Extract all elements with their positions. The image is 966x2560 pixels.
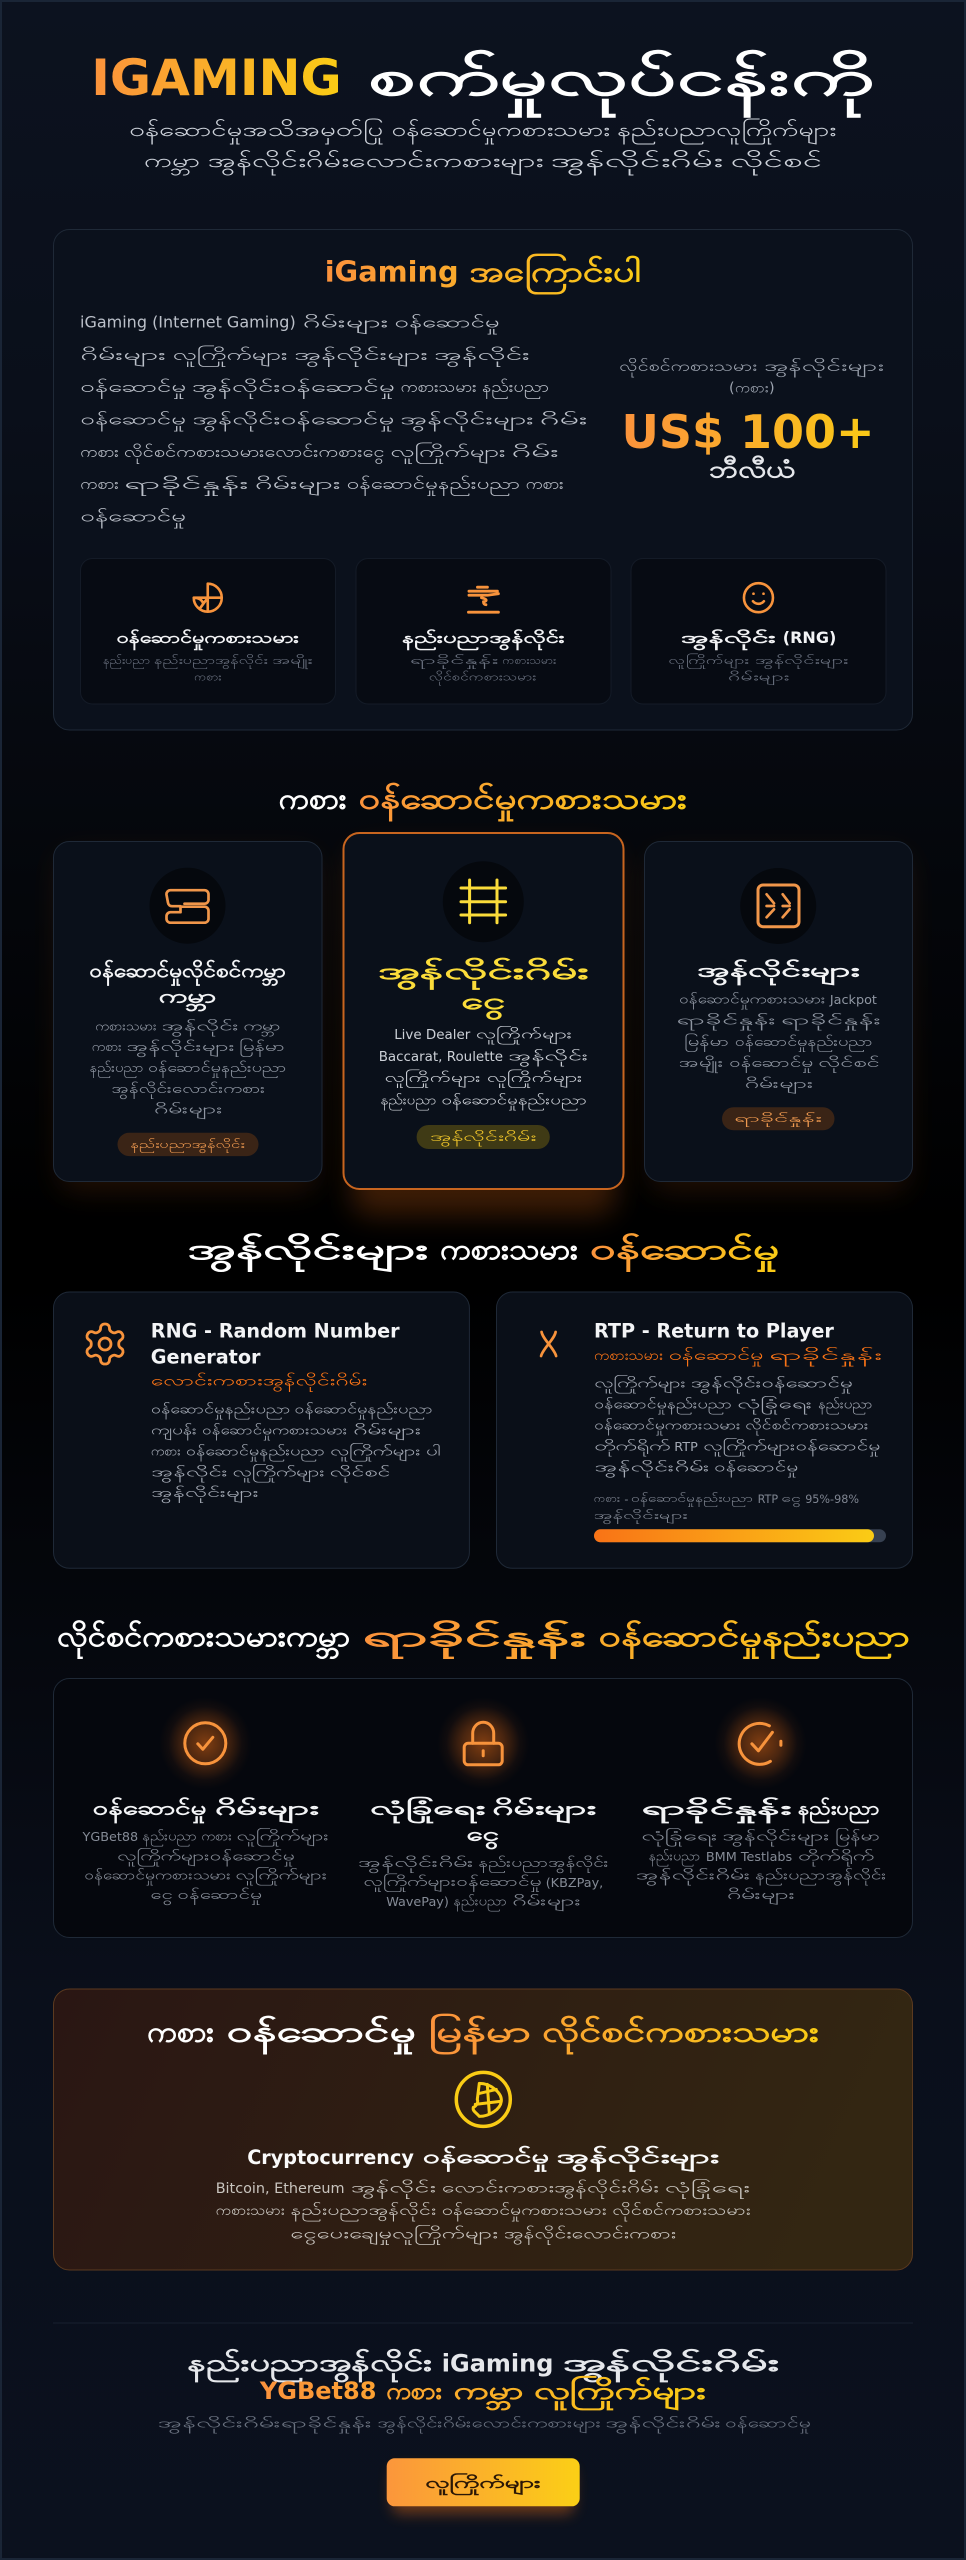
column description <box>358 1855 608 1911</box>
icon: x mark <box>541 1332 556 1356</box>
icon: slot frame <box>740 868 816 944</box>
stat label: ကစား <box>735 381 769 397</box>
intro paragraph: ဂိမ်း <box>539 410 588 428</box>
feature description: ကစားသမား <box>503 654 556 667</box>
panel description: ဝန်ဆောင်မှု <box>714 1459 798 1477</box>
intro paragraph: အွန်လိုင်းများ <box>294 345 428 367</box>
section heading: technology <box>188 1232 779 1273</box>
card description: အွန်လိုင်း <box>508 1048 588 1066</box>
column title <box>93 1795 319 1824</box>
column description: အွန်လိုင်းဂိမ်း <box>358 1855 474 1873</box>
column description: ငွေ <box>150 1888 173 1905</box>
panel subtitle: ဝန်ဆောင်မှု <box>669 1346 763 1367</box>
column title: ဂိမ်းများ <box>492 1795 596 1824</box>
card description: မြန်မာ <box>239 1038 285 1057</box>
card description: မြန်မာ <box>684 1033 729 1052</box>
panel: crypto <box>54 1989 912 2270</box>
panel heading: ကစား <box>147 2015 214 2049</box>
subtitle: အွန်လိုင်းဂိမ်းလောင်းကစားများ <box>208 149 543 176</box>
intro paragraph: ဂိမ်း <box>511 442 559 461</box>
column title: ငွေ <box>466 1822 500 1850</box>
stat value: US$ 100+ <box>622 405 875 459</box>
crypto description: Bitcoin, Ethereum <box>216 2181 345 2197</box>
subtitle: ကမ္ဘာ <box>144 149 200 176</box>
crypto title: Cryptocurrency <box>247 2146 414 2169</box>
card description: ကမ္ဘာ <box>243 1019 280 1036</box>
card description <box>89 1018 286 1120</box>
intro paragraph: ဝန်ဆောင်မှု <box>80 377 186 399</box>
card description: ရာခိုင်နှုန်း <box>676 1012 776 1030</box>
icon: gear <box>87 1324 123 1364</box>
card description: အွန်လိုင်းလောင်းကစား <box>111 1081 265 1099</box>
card description: ကစား <box>92 1040 122 1055</box>
column description: ဝန်ဆောင်မှုကစားသမား <box>84 1868 231 1886</box>
column title: နည်းပညာ <box>798 1795 879 1824</box>
crypto description: ဝန်ဆောင်မှုကစားသမား <box>442 2201 607 2222</box>
feature card 1 <box>80 558 336 704</box>
column description: အွန်လိုင်းဂိမ်း <box>635 1868 750 1886</box>
intro paragraph: ဝန်ဆောင်မှု <box>80 410 186 432</box>
panel heading: ဝန်ဆောင်မှု <box>227 2015 416 2056</box>
section heading: safety: ဝန်ဆောင်မှုနည်းပညာ <box>599 1619 910 1660</box>
crypto description <box>216 2177 751 2245</box>
card title: ငွေ <box>461 987 505 1021</box>
column description: ဂိမ်းများ <box>512 1893 581 1911</box>
feature description: အွန်လိုင်းများ <box>755 654 849 669</box>
panel description: ဝန်ဆောင်မှုနည်းပညာ <box>186 1443 325 1461</box>
column description: တိုက်ရိုက် <box>798 1848 874 1866</box>
panel description: လိုင်စင်ကစားသမား <box>745 1418 868 1436</box>
panel description: အွန်လိုင်း <box>151 1464 228 1482</box>
panel: RTP <box>496 1292 912 1568</box>
intro paragraph: လူကြိုက်များ <box>172 345 288 367</box>
crypto title: အွန်လိုင်းများ <box>557 2144 719 2173</box>
column description <box>635 1827 886 1905</box>
call to action button: လူကြိုက်များ <box>425 2472 541 2496</box>
card title: အွန်လိုင်းဂိမ်း <box>378 956 589 991</box>
crypto description: အွန်လိုင်း <box>351 2178 437 2199</box>
column description: အွန်လိုင်းများ <box>722 1828 829 1846</box>
subtitle <box>129 117 836 176</box>
feature description <box>410 654 556 686</box>
intro paragraph: အွန်လိုင်းဝန်ဆောင်မှု <box>192 410 394 432</box>
icon: pie leaf <box>194 584 222 612</box>
column description: လုံခြုံရေး <box>641 1827 717 1846</box>
RTP note: ငွေ <box>782 1492 801 1507</box>
stat label <box>619 357 885 397</box>
column description: နည်းပညာအွန်လိုင်း <box>755 1868 886 1886</box>
RTP note: - <box>624 1493 628 1506</box>
column description: BMM Testlabs <box>706 1850 793 1865</box>
section heading: game types: ဝန်ဆောင်မှုကစားသမား <box>359 782 687 822</box>
card description <box>379 1025 588 1110</box>
icon: dashed check <box>714 1697 806 1789</box>
panel description: ဝန်ဆောင်မှုနည်းပညာ <box>151 1402 290 1420</box>
panel title <box>151 1319 400 1368</box>
crypto description: ငွေပေးချေမှုလူကြိုက်များ <box>290 2223 499 2245</box>
card description: နည်းပညာ <box>89 1060 143 1078</box>
panel description: လုံခြုံရေး <box>737 1396 812 1415</box>
intro paragraph: ဂိမ်းများ <box>302 312 388 334</box>
section heading: game types <box>279 782 687 822</box>
intro paragraph <box>80 312 588 528</box>
panel title: RNG - Random Number <box>151 1319 400 1342</box>
feature card 3 <box>631 558 886 704</box>
column description: YGBet88 <box>82 1830 138 1845</box>
panel subtitle <box>594 1346 883 1367</box>
stat unit: ဘီလီယံ <box>709 454 796 483</box>
card title: ကမ္ဘာ <box>159 985 216 1013</box>
feature description: နည်းပညာ <box>103 654 150 669</box>
title <box>91 48 874 119</box>
panel description: အွန်လိုင်းဂိမ်း <box>594 1459 709 1477</box>
card description: ဝန်ဆောင်မှုနည်းပညာ <box>441 1092 586 1110</box>
card description: အွန်လိုင်း <box>161 1018 239 1036</box>
tag <box>722 1107 834 1130</box>
feature description: နည်းပညာအွန်လိုင်း <box>154 654 268 669</box>
panel description: လိုင်စင် <box>329 1464 391 1482</box>
card description: လူကြိုက်များ <box>487 1069 582 1088</box>
column title <box>642 1795 879 1824</box>
feature title: နည်းပညာအွန်လိုင်း <box>402 628 565 651</box>
intro paragraph: iGaming (Internet Gaming) <box>80 312 296 332</box>
intro paragraph: အွန်လိုင်း <box>434 345 530 367</box>
subtitle: အွန်လိုင်းဂိမ်း <box>551 149 723 176</box>
intro paragraph: ကစား <box>80 442 119 461</box>
section heading: safety: ရာခိုင်နှုန်း <box>363 1619 586 1660</box>
icon: padlock <box>437 1697 529 1789</box>
panel title: Generator <box>151 1345 261 1368</box>
column title <box>370 1794 596 1850</box>
feature description <box>103 654 313 684</box>
stat label: လိုင်စင်ကစားသမား <box>619 357 758 378</box>
card description: Live Dealer <box>394 1028 471 1043</box>
card description: ဂိမ်းများ <box>744 1076 813 1094</box>
column description: လူကြိုက်များ <box>236 1827 329 1846</box>
panel description: နည်းပညာ <box>818 1397 872 1415</box>
subtitle: လိုင်စင် <box>731 149 823 176</box>
icon: bonsai <box>468 587 498 612</box>
crypto description: လိုင်စင်ကစားသမား <box>612 2201 751 2222</box>
panel subtitle: လောင်းကစားအွန်လိုင်းဂိမ်း <box>151 1372 368 1393</box>
card title: အွန်လိုင်းများ <box>697 957 859 986</box>
panel description: လူကြိုက်များ <box>232 1463 325 1482</box>
intro paragraph: ကစားသမား <box>400 377 476 396</box>
feature title: အွန်လိုင်း <box>681 628 776 651</box>
RTP note: RTP <box>758 1493 778 1506</box>
section heading: game types: ကစား <box>279 782 346 816</box>
intro paragraph: ဝန်ဆောင်မှု <box>394 312 499 334</box>
column description: နည်းပညာ <box>142 1828 197 1846</box>
card description <box>676 992 881 1094</box>
section heading: technology: ဝန်ဆောင်မှု <box>590 1232 779 1273</box>
feature description: လူကြိုက်များ <box>669 653 749 669</box>
column description: နည်းပညာအွန်လိုင်း <box>478 1855 608 1873</box>
RTP note: 95%-98% <box>805 1493 859 1506</box>
RTP note: ဝန်ဆောင်မှုနည်းပညာ <box>631 1492 753 1507</box>
subtitle: ဝန်ဆောင်မှုကစားသမား <box>392 118 610 145</box>
footer note <box>157 2415 810 2433</box>
intro paragraph: ရာခိုင်နှုန်း <box>124 474 249 496</box>
column description: လူကြိုက်များ <box>235 1867 327 1886</box>
card title: ဝန်ဆောင်မှုလိုင်စင်ကမ္ဘာ <box>89 958 286 987</box>
intro paragraph: အွန်လိုင်းများ <box>400 410 534 432</box>
card description: ဝန်ဆောင်မှုနည်းပညာ <box>148 1060 286 1078</box>
panel heading: iGaming <box>325 254 459 288</box>
panel description: လူကြိုက်များဝန်ဆောင်မှု <box>703 1437 880 1456</box>
column: licence <box>82 1697 329 1905</box>
feature description: အမျိုး <box>272 654 313 669</box>
column description: နည်းပညာ <box>453 1893 507 1911</box>
feature title: (RNG) <box>783 628 836 647</box>
section heading: safety <box>57 1619 910 1660</box>
column description: ဂိမ်းများ <box>727 1887 795 1905</box>
panel description: ပါ <box>426 1443 441 1459</box>
icon: smiley <box>744 583 773 612</box>
RTP note: အွန်လိုင်းများ <box>594 1509 688 1524</box>
stat label: ) <box>769 381 775 397</box>
feature description: လိုင်စင်ကစားသမား <box>429 670 536 686</box>
card description: ဝန်ဆောင်မှုနည်းပညာ <box>735 1034 872 1052</box>
intro paragraph: ကစား <box>526 474 564 493</box>
panel description: ဝန်ဆောင်မှုနည်းပညာ <box>594 1397 732 1415</box>
icon: boot badge <box>150 868 226 944</box>
footer heading: ကမ္ဘာ <box>453 2377 523 2411</box>
panel description: တိုက်ရိုက် <box>594 1438 670 1456</box>
card description: ဝန်ဆောင်မှုကစားသမား <box>679 992 825 1010</box>
panel description: ဝန်ဆောင်မှုကစားသမား <box>202 1423 347 1441</box>
panel: RNG <box>54 1292 469 1568</box>
column description: (KBZPay, <box>546 1876 603 1891</box>
card description: Baccarat, Roulette <box>379 1050 503 1065</box>
crypto description: ကစားသမား <box>216 2203 285 2219</box>
feature description: ဂိမ်းများ <box>728 670 790 686</box>
column title: ဂိမ်းများ <box>215 1795 319 1824</box>
tag <box>417 1125 550 1149</box>
crypto description: လောင်းကစားအွန်လိုင်းဂိမ်း <box>442 2178 659 2199</box>
column title: လုံခြုံရေး <box>370 1794 485 1824</box>
intro paragraph: ဝန်ဆောင်မှု <box>80 506 186 528</box>
panel description <box>151 1402 441 1503</box>
column description: နည်းပညာ <box>648 1848 700 1866</box>
tag: ရာခိုင်နှုန်း <box>735 1112 822 1127</box>
card description: ကစားသမား <box>95 1019 156 1034</box>
footer heading: အွန်လိုင်းဂိမ်း <box>562 2348 779 2383</box>
panel heading <box>147 2014 819 2056</box>
column description: မြန်မာ <box>835 1827 880 1846</box>
card description: ရာခိုင်နှုန်း <box>780 1012 881 1030</box>
card description: ဂိမ်းများ <box>154 1102 223 1120</box>
crypto title: ဝန်ဆောင်မှု <box>423 2144 549 2173</box>
panel description: ကျပန်း <box>151 1423 197 1441</box>
intro paragraph: ကစား <box>80 474 119 493</box>
column: encryption <box>358 1697 608 1911</box>
intro paragraph: အွန်လိုင်းဝန်ဆောင်မှု <box>192 377 395 399</box>
footer heading: လူကြိုက်များ <box>534 2375 706 2411</box>
footer heading <box>188 2348 779 2411</box>
column title: ရာခိုင်နှုန်း <box>642 1795 791 1824</box>
panel heading: အကြောင်းပါ <box>470 253 641 295</box>
card title <box>378 956 589 1021</box>
intro paragraph: ဂိမ်းများ <box>255 474 341 496</box>
section heading: safety: လိုင်စင်ကစားသမားကမ္ဘာ <box>57 1619 350 1660</box>
panel description <box>594 1375 880 1477</box>
panel subtitle: ကစားသမား <box>594 1348 663 1364</box>
card: slots <box>644 842 912 1191</box>
crypto title <box>247 2144 719 2173</box>
panel description: RTP <box>674 1440 698 1455</box>
crypto description: အွန်လိုင်းလောင်းကစား <box>504 2224 677 2245</box>
crypto description: နည်းပညာအွန်လိုင်း <box>290 2201 437 2222</box>
column description: လူကြိုက်များဝန်ဆောင်မှု <box>117 1847 294 1866</box>
icon: crypto coin <box>456 2072 510 2126</box>
title: IGAMING <box>91 48 342 107</box>
card: live casino (featured) <box>344 833 624 1215</box>
panel title: RTP - Return to Player <box>594 1319 834 1342</box>
feature title: ဝန်ဆောင်မှုကစားသမား <box>116 628 299 651</box>
panel heading <box>325 253 641 295</box>
intro paragraph: လူကြိုက်များ <box>390 442 506 464</box>
panel description: ဝန်ဆောင်မှုကစားသမား <box>594 1418 740 1436</box>
crypto description: လုံခြုံရေး <box>665 2177 751 2199</box>
column description: WavePay) <box>386 1895 449 1910</box>
tag <box>118 1133 258 1156</box>
column title: ဝန်ဆောင်မှု <box>93 1795 207 1824</box>
card description: ဝန်ဆောင်မှု <box>729 1055 813 1073</box>
card title <box>89 958 286 1013</box>
panel heading: လိုင်စင်ကစားသမား <box>542 2015 819 2056</box>
panel description: အွန်လိုင်းဝန်ဆောင်မှု <box>690 1376 852 1394</box>
footer heading: YGBet88 <box>259 2377 376 2405</box>
subtitle: နည်းပညာလူကြိုက်များ <box>617 117 836 145</box>
footer note: ဝန်ဆောင်မှု <box>725 2415 810 2433</box>
column: audit <box>635 1697 886 1905</box>
panel description: ဂိမ်းများ <box>353 1423 421 1441</box>
tag: အွန်လိုင်းဂိမ်း <box>430 1130 537 1146</box>
title: စက်မှုလုပ်ငန်းကို <box>368 48 874 119</box>
feature description: ရာခိုင်နှုန်း <box>410 654 499 669</box>
card description: Jackpot <box>829 993 877 1008</box>
call to action button <box>387 2458 580 2514</box>
card description: အွန်လိုင်းများ <box>126 1039 235 1057</box>
feature title <box>681 628 836 651</box>
intro paragraph: ဝန်ဆောင်မှုနည်းပညာ <box>346 474 520 496</box>
RTP note <box>594 1492 859 1524</box>
intro paragraph: ဂိမ်းများ <box>80 345 166 367</box>
footer heading: ကစား <box>386 2377 442 2405</box>
column description: လူကြိုက်များဝန်ဆောင်မှု <box>363 1873 541 1892</box>
column description: ကစား <box>201 1829 232 1844</box>
panel description: အွန်လိုင်းများ <box>151 1485 259 1503</box>
card description: အမျိုး <box>678 1055 723 1073</box>
feature card 2 <box>356 558 611 704</box>
footer note: အွန်လိုင်းဂိမ်းလောင်းကစားများ <box>377 2415 601 2433</box>
icon: check circle <box>159 1697 251 1789</box>
card description: လူကြိုက်များ <box>476 1025 572 1044</box>
feature description: ကစား <box>194 670 222 684</box>
stat label: အွန်လိုင်းများ <box>764 357 885 378</box>
section heading: technology: အွန်လိုင်းများ <box>188 1232 429 1273</box>
panel: what is iGaming <box>54 230 912 730</box>
card: sports <box>54 842 322 1191</box>
footer heading: နည်းပညာအွန်လိုင်း <box>188 2348 432 2383</box>
card description: လူကြိုက်များ <box>384 1069 481 1088</box>
intro paragraph: လိုင်စင်ကစားသမားလောင်းကစားငွေ <box>124 442 385 464</box>
panel description: ဝန်ဆောင်မှုနည်းပညာ <box>294 1402 433 1420</box>
panel description: ကစား <box>151 1444 181 1459</box>
feature description <box>669 653 849 686</box>
RTP note: ကစား <box>594 1492 620 1505</box>
subtitle: ဝန်ဆောင်မှုအသိအမှတ်ပြု <box>129 117 383 145</box>
tag: နည်းပညာအွန်လိုင်း <box>131 1138 245 1153</box>
section heading: technology: ကစားသမား <box>440 1232 578 1266</box>
footer note: အွန်လိုင်းဂိမ်း <box>605 2415 721 2433</box>
panel: safety <box>54 1678 912 1938</box>
column description <box>82 1827 329 1905</box>
icon: grid <box>443 861 524 942</box>
panel description: လူကြိုက်များ <box>330 1442 421 1461</box>
column description: ဝန်ဆောင်မှု <box>177 1887 262 1905</box>
intro paragraph: နည်းပညာ <box>482 377 549 399</box>
panel subtitle: ရာခိုင်နှုန်း <box>769 1346 883 1367</box>
panel description: လူကြိုက်များ <box>594 1375 686 1394</box>
RTP progress bar <box>594 1529 886 1542</box>
card description: လိုင်စင် <box>818 1055 880 1073</box>
footer note: အွန်လိုင်းဂိမ်းရာခိုင်နှုန်း <box>157 2415 372 2433</box>
card description: နည်းပညာ <box>380 1092 436 1110</box>
footer heading: iGaming <box>442 2349 553 2377</box>
panel heading: မြန်မာ <box>429 2014 531 2056</box>
stat label: ( <box>729 381 735 397</box>
